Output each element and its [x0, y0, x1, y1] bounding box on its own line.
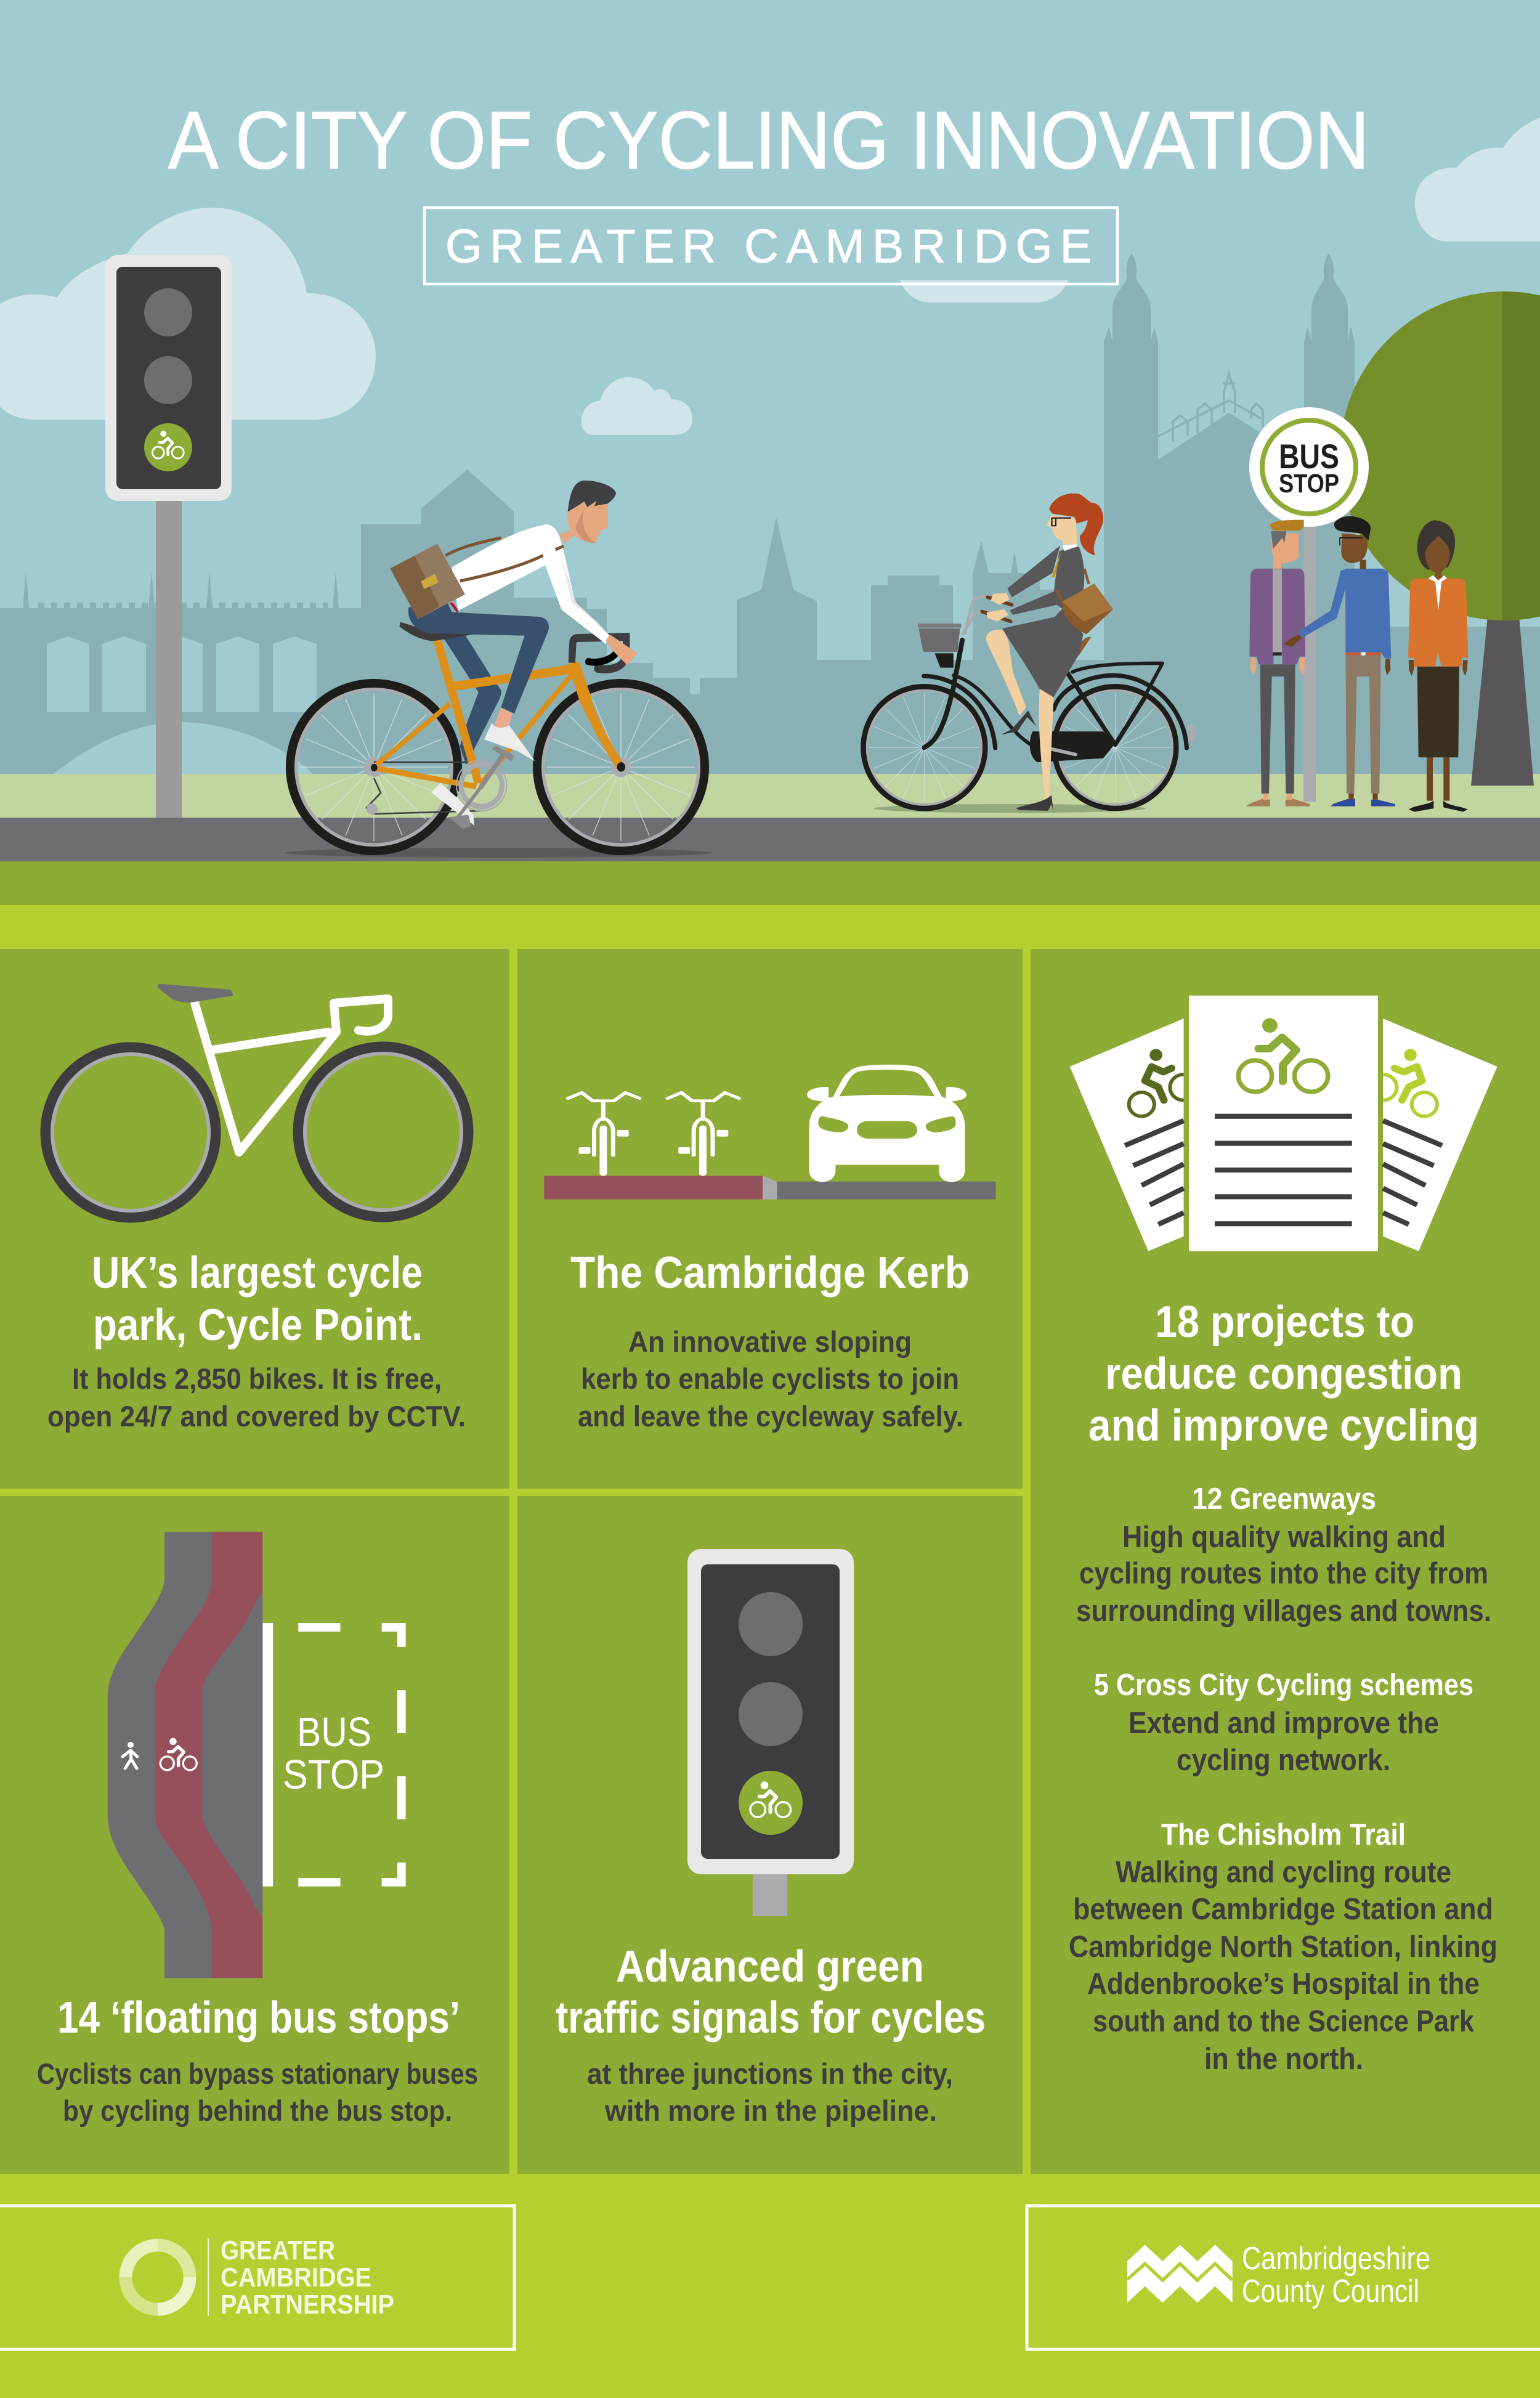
bus stop label: STOP	[283, 1752, 384, 1798]
person: woman in orange jacket	[1408, 520, 1468, 811]
footer logo box: Greater Cambridge Partnership: GREATER	[221, 2235, 335, 2266]
lime background	[0, 905, 1540, 2398]
jacket	[1007, 545, 1061, 615]
icon: cyclist	[152, 431, 184, 458]
description: Cyclists can bypass stationary buses	[37, 2057, 478, 2090]
bus stop label	[283, 1709, 384, 1798]
bus stop sign: BUS	[1279, 437, 1339, 476]
person: man in blue sweater	[1284, 516, 1395, 807]
arm	[544, 524, 610, 644]
handlebars	[572, 637, 626, 663]
text: The Chisholm Trail	[1069, 1818, 1497, 2076]
icon: car front view	[807, 1065, 967, 1182]
text: 12 Greenways: High quality walking and	[1122, 1521, 1446, 1554]
heading: The Cambridge Kerb	[570, 1248, 970, 1298]
icon: road bicycle	[46, 984, 468, 1217]
saddle	[1074, 637, 1091, 656]
title: A CITY OF CYCLING INNOVATION	[168, 95, 1369, 185]
icon: cyclist left	[1129, 1049, 1184, 1116]
road	[0, 818, 1540, 861]
bridge arches	[47, 636, 317, 775]
icon: cyclist right	[1383, 1049, 1437, 1116]
description: and leave the cycleway safely.	[578, 1400, 963, 1433]
text: The Chisholm Trail: Walking and cycling route	[1116, 1856, 1451, 1889]
heading: 18 projects to	[1155, 1298, 1414, 1347]
panel: advanced green signals	[517, 1496, 1023, 2174]
icon: bike front view	[568, 1092, 639, 1176]
description: with more in the pipeline.	[604, 2094, 937, 2127]
orange frame	[376, 640, 575, 787]
footer logo box: Cambridgeshire County Council	[1027, 2206, 1540, 2349]
legs	[986, 630, 1026, 716]
back foot	[431, 783, 474, 826]
ankle and shoe	[495, 707, 513, 728]
bus stop sign	[1249, 407, 1369, 802]
floating bus stop diagram	[108, 1532, 406, 1978]
woman cyclist on black bike	[863, 494, 1195, 813]
heading	[1088, 1298, 1479, 1450]
panel: floating bus stops	[0, 1496, 509, 2174]
bus stop sign: STOP	[1279, 469, 1339, 498]
heading: UK’s largest cycle	[92, 1248, 423, 1298]
tree	[1340, 291, 1540, 786]
text: The Chisholm Trail: The Chisholm Trail	[1161, 1818, 1406, 1851]
description: An innovative sloping	[628, 1325, 912, 1358]
heading: traffic signals for cycles	[556, 1993, 986, 2042]
heading: reduce congestion	[1105, 1349, 1462, 1399]
people waiting at bus stop	[1246, 516, 1468, 811]
text: 12 Greenways	[1076, 1482, 1491, 1628]
sky background	[0, 0, 1540, 819]
red shirt tail	[450, 603, 459, 612]
heading	[92, 1248, 423, 1350]
heading	[556, 1942, 986, 2042]
torso	[452, 524, 550, 611]
man cyclist on orange bike	[285, 481, 712, 858]
hands	[986, 593, 1010, 622]
person: man in purple jacket	[1246, 520, 1310, 807]
hand	[606, 635, 638, 665]
heading: park, Cycle Point.	[93, 1301, 423, 1350]
description	[37, 2057, 478, 2127]
panel: Cambridge Kerb	[517, 949, 1023, 1489]
description	[578, 1325, 963, 1433]
icon: pedestrian	[123, 1742, 137, 1768]
rear wheel	[290, 683, 458, 851]
grass verge	[0, 774, 1540, 818]
icon: county council chevrons	[1127, 2245, 1233, 2302]
text: The Chisholm Trail: Addenbrooke’s Hospital in the	[1087, 1967, 1480, 2001]
description: It holds 2,850 bikes. It is free,	[72, 1362, 442, 1395]
shoes	[1001, 710, 1036, 734]
description: by cycling behind the bus stop.	[63, 2094, 452, 2127]
icon: cyclist	[160, 1738, 197, 1770]
green band	[0, 861, 1540, 905]
text: 12 Greenways: surrounding villages and towns.	[1076, 1595, 1491, 1628]
footer logo box: Greater Cambridge Partnership: PARTNERSHIP	[221, 2290, 394, 2320]
front wheel	[537, 683, 705, 851]
heading: Advanced green	[616, 1942, 924, 1991]
footer logo box: Greater Cambridge Partnership	[0, 2206, 514, 2349]
icon: cycle traffic signal	[687, 1549, 854, 1916]
derailleur and chain	[366, 762, 480, 814]
icon: bike front view	[668, 1092, 739, 1176]
chain guard	[1030, 731, 1115, 762]
back leg	[444, 633, 501, 765]
description: at three junctions in the city,	[587, 2057, 953, 2090]
text: The Chisholm Trail: between Cambridge Station and	[1073, 1893, 1493, 1926]
bag	[390, 543, 465, 619]
head	[1047, 514, 1077, 545]
heading: 14 ‘floating bus stops’	[57, 1993, 460, 2042]
heading: and improve cycling	[1088, 1401, 1479, 1450]
subtitle box	[424, 208, 1117, 284]
front leg	[408, 603, 549, 713]
icon: project documents	[1070, 996, 1497, 1251]
text: 5 Cross City Cycling schemes: 5 Cross City Cycling schemes	[1094, 1668, 1473, 1702]
panel: Cycle Point	[0, 949, 509, 1489]
city skyline silhouette	[0, 253, 1540, 776]
text: 5 Cross City Cycling schemes: Extend and improve the	[1129, 1707, 1439, 1740]
text: 12 Greenways: 12 Greenways	[1192, 1482, 1376, 1516]
bus stop label: BUS	[297, 1709, 371, 1755]
basket and lamp	[918, 624, 961, 628]
handlebars	[962, 596, 991, 635]
black frame and mudguards	[924, 640, 1186, 748]
chainring	[456, 760, 506, 811]
kerb diagram	[544, 1065, 996, 1200]
text: 5 Cross City Cycling schemes	[1094, 1668, 1473, 1777]
subtitle box: GREATER CAMBRIDGE	[445, 220, 1092, 273]
description	[587, 2057, 953, 2127]
messenger bag	[1057, 569, 1088, 605]
footer logo box: Cambridgeshire County Council: County Council	[1242, 2274, 1419, 2309]
description: kerb to enable cyclists to join	[581, 1362, 959, 1395]
front wheel	[869, 693, 979, 802]
traffic light with cycle signal	[105, 255, 232, 818]
icon: ring logo	[126, 2245, 190, 2309]
text: 5 Cross City Cycling schemes: cycling network.	[1177, 1744, 1390, 1777]
text: 12 Greenways: cycling routes into the city from	[1079, 1557, 1488, 1590]
skirt	[1002, 606, 1084, 697]
neck and head	[559, 530, 575, 543]
bag straps	[445, 538, 564, 581]
rear wheel	[1060, 693, 1170, 802]
text: The Chisholm Trail: in the north.	[1204, 2042, 1363, 2076]
description: open 24/7 and covered by CCTV.	[47, 1400, 466, 1433]
clouds	[0, 118, 1540, 435]
footer logo box: Cambridgeshire County Council: Cambridgeshire	[1242, 2241, 1430, 2277]
text: The Chisholm Trail: Cambridge North Station, linking	[1069, 1930, 1497, 1964]
footer logo box: Greater Cambridge Partnership: CAMBRIDGE	[221, 2262, 371, 2293]
saddle	[399, 622, 473, 641]
icon: cyclist centre	[1238, 1018, 1328, 1092]
panel: 18 projects	[1031, 949, 1540, 2174]
description	[47, 1362, 466, 1433]
text: The Chisholm Trail: south and to the Science Park	[1093, 2005, 1475, 2038]
